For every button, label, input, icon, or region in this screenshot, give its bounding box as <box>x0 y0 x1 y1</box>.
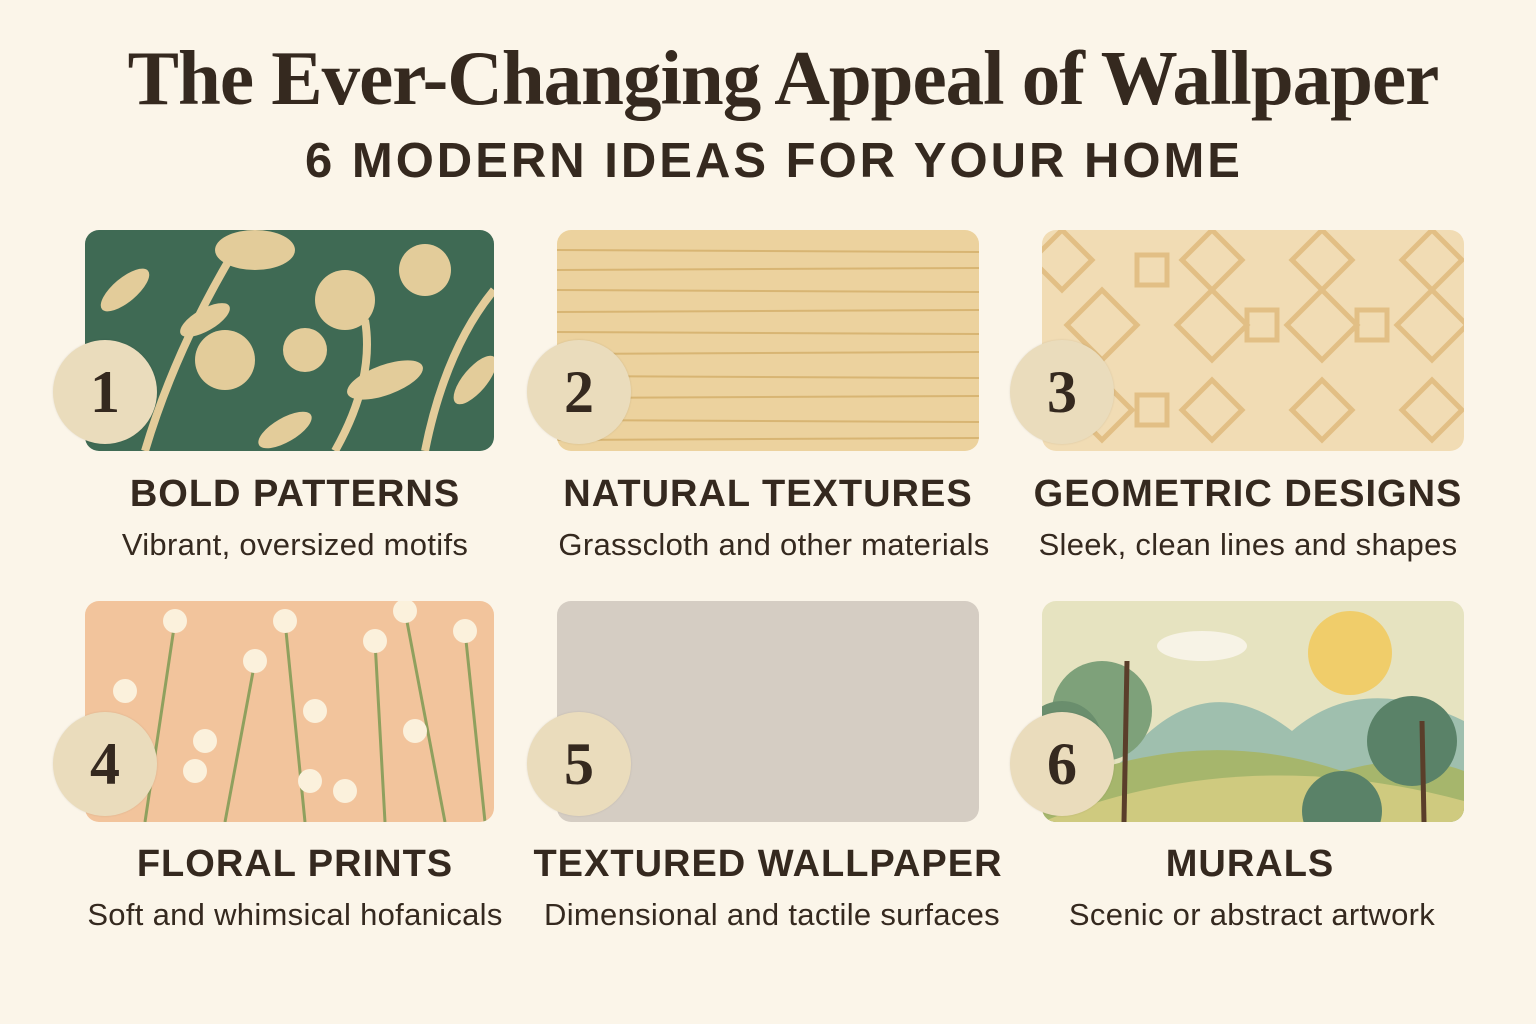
card 4: floral prints <box>85 601 494 822</box>
subtitle: 6 MODERN IDEAS FOR YOUR HOME <box>305 134 1243 188</box>
description 4: Soft and whimsical hofanicals <box>87 897 503 932</box>
heading 3: GEOMETRIC DESIGNS <box>1034 473 1462 515</box>
heading 2: NATURAL TEXTURES <box>563 473 973 515</box>
number 3 <box>1010 340 1114 444</box>
number 5 <box>527 712 631 816</box>
description 3: Sleek, clean lines and shapes <box>1039 527 1457 562</box>
number 2: 2 <box>564 359 594 425</box>
description 2: Grasscloth and other materials <box>558 527 990 562</box>
description 6: Scenic or abstract artwork <box>1069 897 1435 932</box>
heading 5: TEXTURED WALLPAPER <box>533 843 1003 885</box>
number 6: 6 <box>1047 731 1077 797</box>
heading 1: BOLD PATTERNS <box>130 473 460 515</box>
card 2: natural textures <box>557 230 979 451</box>
number 4 <box>53 712 157 816</box>
card 5: textured wallpaper <box>557 601 979 822</box>
description 1: Vibrant, oversized motifs <box>122 527 468 562</box>
number 2 <box>527 340 631 444</box>
number 3: 3 <box>1047 359 1077 425</box>
number 4: 4 <box>90 731 120 797</box>
number 1: 1 <box>90 359 120 425</box>
card 3: geometric designs <box>1042 230 1464 451</box>
number 5: 5 <box>564 731 594 797</box>
card 1: bold patterns <box>85 230 494 451</box>
heading 4: FLORAL PRINTS <box>137 843 453 885</box>
description 5: Dimensional and tactile surfaces <box>544 897 1000 932</box>
heading 6: MURALS <box>1166 843 1334 885</box>
number 6 <box>1010 712 1114 816</box>
card 6: murals <box>1042 601 1464 822</box>
number 1 <box>53 340 157 444</box>
title: The Ever-Changing Appeal of Wallpaper <box>128 35 1438 121</box>
